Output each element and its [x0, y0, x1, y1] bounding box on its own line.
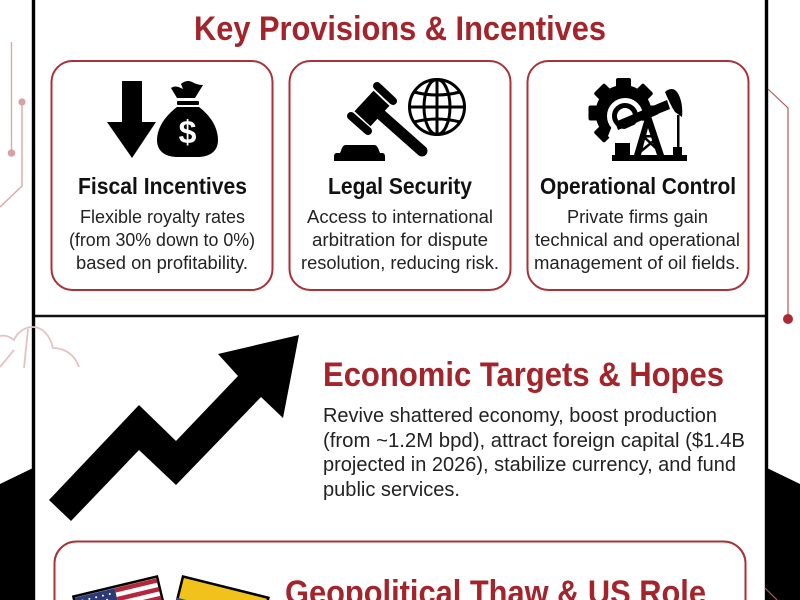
- text: legal security description: arbitration for dispute: [312, 230, 488, 250]
- heading: economic targets and hopes: Economic Targets & Hopes: [323, 356, 724, 394]
- text: legal security description: [301, 207, 499, 273]
- heading: fiscal incentives: Fiscal Incentives: [78, 173, 247, 199]
- text: fiscal incentives description: (from 30% down to 0%): [69, 230, 255, 250]
- icon: gavel: [334, 86, 422, 161]
- icon: US flag: [73, 576, 167, 600]
- title: Key Provisions & Incentives: [194, 10, 606, 48]
- icon: money bag: [157, 81, 218, 157]
- right circuit decoration: [765, 89, 793, 600]
- text: economic targets description: projected in 2026), stabilize currency, and fund: [323, 454, 736, 476]
- text: economic targets description: [323, 405, 745, 501]
- left black mountain silhouette: [0, 468, 33, 600]
- text: economic targets description: (from ~1.2M bpd), attract foreign capital ($1.4B: [323, 430, 745, 452]
- icon: Venezuela flag: [171, 576, 269, 600]
- heading: legal security: Legal Security: [328, 173, 472, 199]
- panel: fiscal incentives: [52, 61, 272, 290]
- text: fiscal incentives description: [69, 207, 255, 273]
- heading: operational control: Operational Control: [540, 173, 736, 199]
- text: economic targets description: Revive shattered economy, boost production: [323, 405, 717, 427]
- text: legal security description: Access to international: [307, 207, 493, 227]
- panel: operational control: [528, 61, 748, 290]
- panel: geopolitical thaw and US role: [54, 541, 746, 600]
- cloud outline decoration: [0, 327, 79, 368]
- icon: down arrow: [107, 81, 156, 158]
- text: operational control description: management of oil fields.: [534, 253, 740, 273]
- text: fiscal incentives description: Flexible royalty rates: [80, 207, 245, 227]
- text: operational control description: [534, 207, 740, 273]
- left circuit decoration: [0, 42, 26, 207]
- icon: rising trend arrow: [49, 335, 299, 521]
- icon: globe: [409, 79, 465, 135]
- icon: gear and pump jack: [588, 78, 687, 162]
- text: economic targets description: public services.: [323, 479, 460, 501]
- text: operational control description: Private firms gain: [567, 207, 708, 227]
- text: fiscal incentives description: based on profitability.: [76, 253, 248, 273]
- text: operational control description: technical and operational: [535, 230, 740, 250]
- text: legal security description: resolution, reducing risk.: [301, 253, 499, 273]
- panel: legal security: [290, 61, 510, 290]
- icon: money bag: $: [179, 114, 197, 150]
- right black mountain silhouette: [767, 468, 800, 600]
